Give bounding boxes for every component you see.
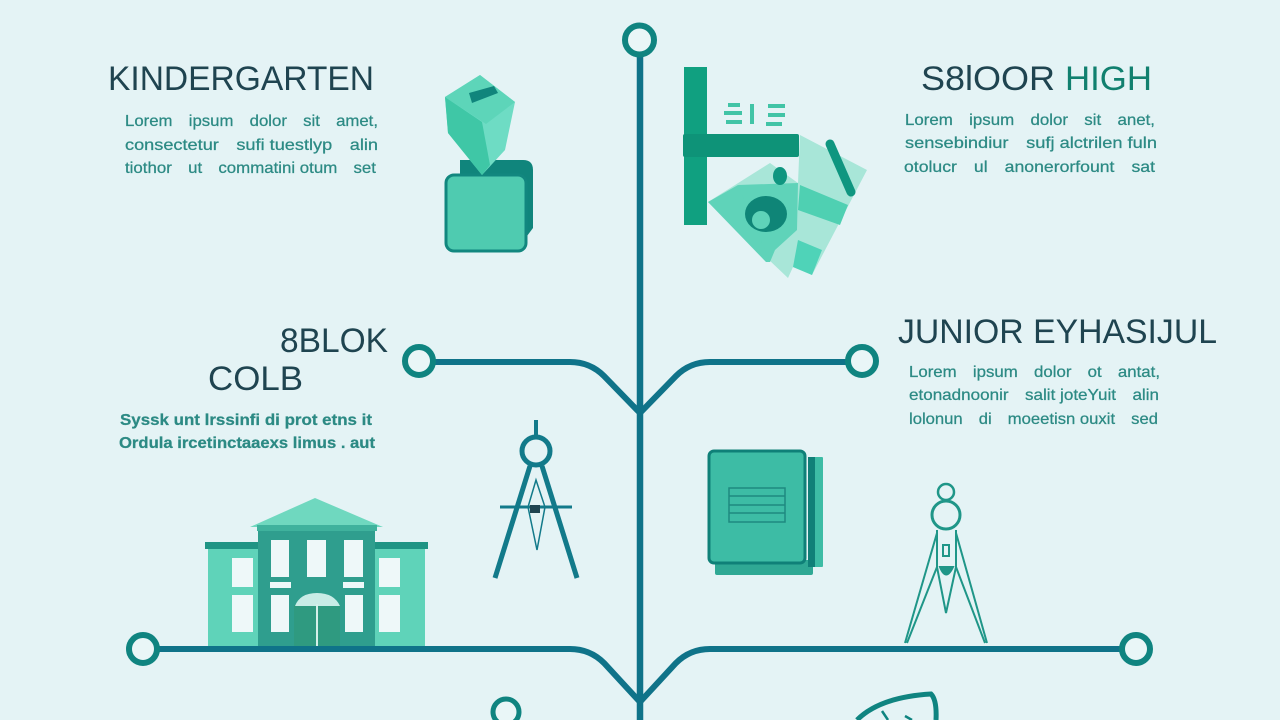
text block: junior high: etonadnoonir salit joteYuit alin xyxy=(909,387,1159,404)
timeline tree xyxy=(129,26,1150,720)
text block: kindergarten: Lorem ipsum dolor sit amet, xyxy=(125,113,378,130)
text block: kindergarten: consectetur sufi tuestlyp alin xyxy=(125,137,378,154)
icon: blocks xyxy=(445,75,533,251)
heading: senior high: HIGH xyxy=(1065,60,1152,98)
heading: senior high: S8lOOR xyxy=(921,60,1055,98)
text block: kindergarten xyxy=(125,113,378,177)
icon: book xyxy=(709,451,823,575)
text block: college: Syssk unt lrssinfi di prot etns it xyxy=(120,412,373,429)
text block: junior high: Lorem ipsum dolor ot antat, xyxy=(909,364,1160,381)
icon: map and ruler xyxy=(683,67,867,278)
text block: senior high: otolucr ul anonerorfount sat xyxy=(904,159,1156,176)
icon: drawing compass xyxy=(495,420,577,578)
text block: junior high xyxy=(909,364,1160,428)
text block: senior high xyxy=(904,112,1157,176)
heading: senior high xyxy=(921,60,1152,98)
text block: college: Ordula ircetinctaaexs limus . aut xyxy=(119,435,376,452)
text block: senior high: sensebindiur sufj alctrilen fuln xyxy=(905,135,1157,152)
text block: college xyxy=(119,412,376,452)
icon: thin compass xyxy=(905,484,987,643)
heading: school college: COLB xyxy=(208,360,303,398)
heading: school college xyxy=(208,322,388,398)
text block: kindergarten: tiothor ut commatini otum set xyxy=(125,160,377,177)
heading: school college: 8BLOK xyxy=(280,322,388,360)
heading: junior high: JUNIOR EYHASIJUL xyxy=(898,313,1217,351)
heading: kindergarten: KINDERGARTEN xyxy=(108,60,374,98)
icon: school building xyxy=(205,498,428,646)
icon: leaf xyxy=(857,694,936,720)
text block: junior high: lolonun di moeetisn ouxit sed xyxy=(909,411,1158,428)
text block: senior high: Lorem ipsum dolor sit anet, xyxy=(905,112,1155,129)
